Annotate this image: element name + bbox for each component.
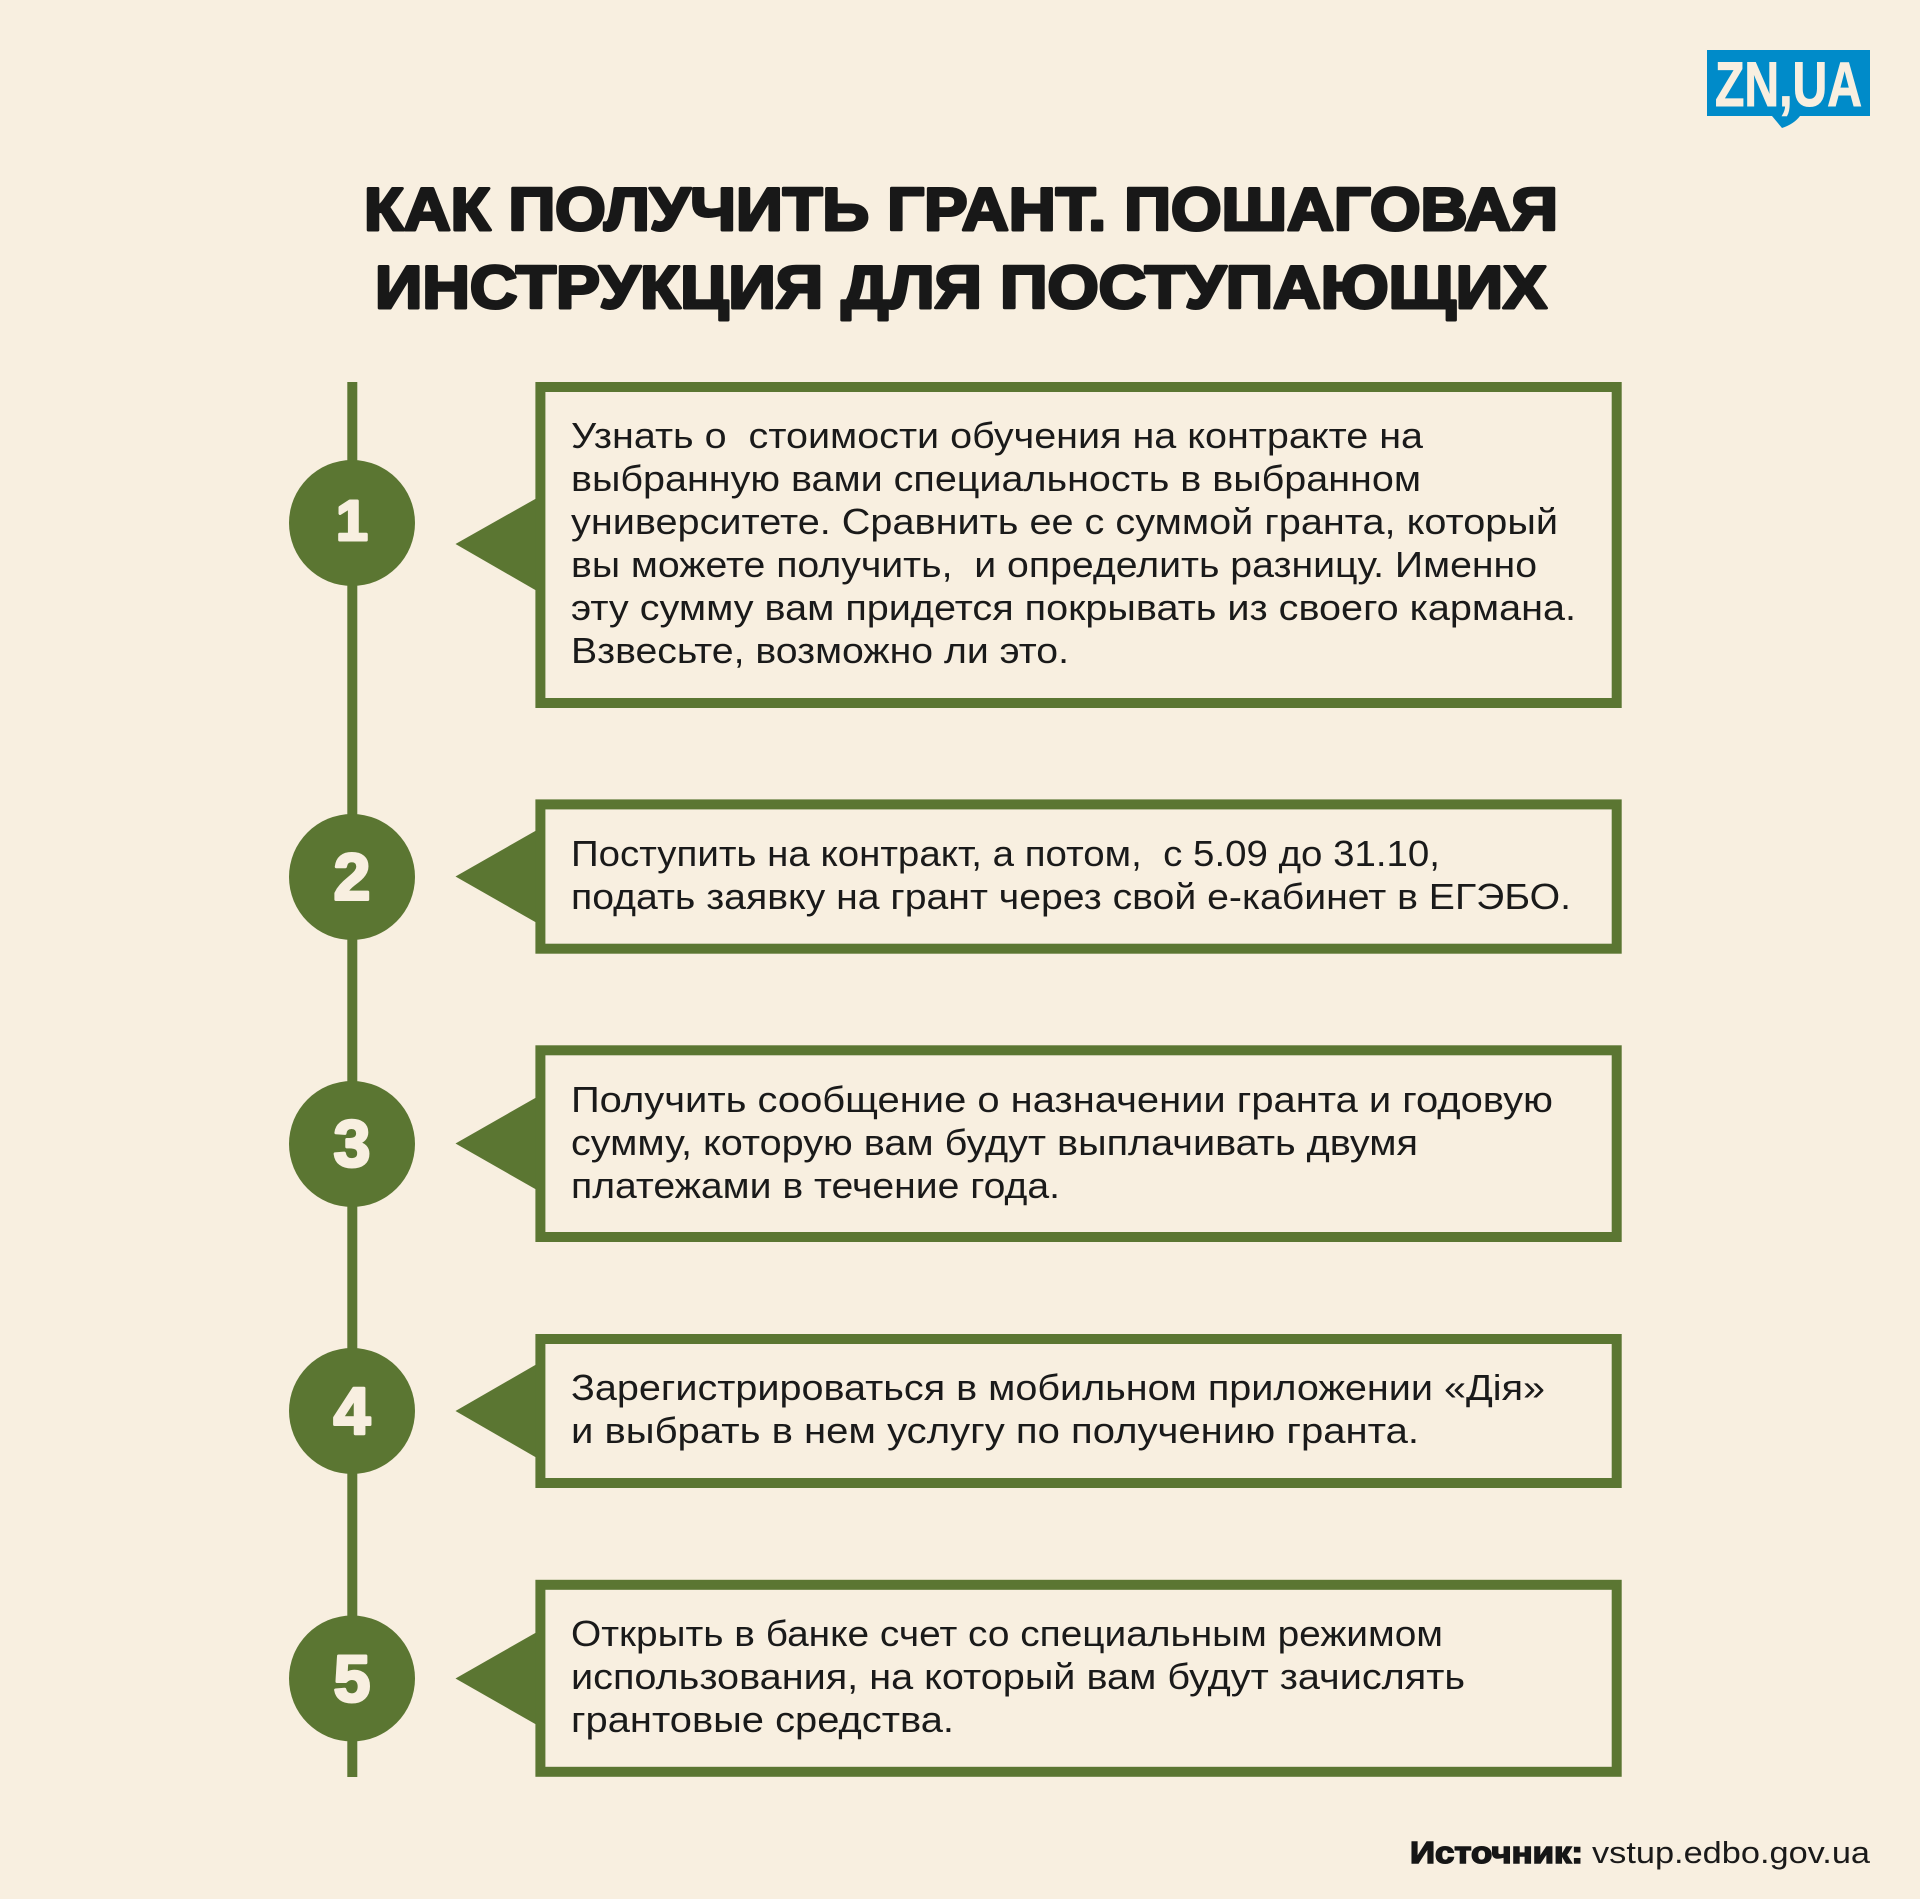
step 3 number badge bbox=[289, 1081, 415, 1207]
step 2 number badge: 2 bbox=[334, 840, 370, 914]
step 1 text: Узнать о стоимости обучения на контракте на bbox=[571, 415, 1424, 456]
step 1 text bbox=[571, 415, 1576, 671]
step 3 text: сумму, которую вам будут выплачивать двумя bbox=[571, 1122, 1418, 1163]
step 4 bbox=[289, 1339, 1617, 1483]
step 4 text bbox=[571, 1367, 1545, 1451]
step 1 pointer arrow bbox=[456, 498, 537, 591]
step 3 text box bbox=[540, 1050, 1617, 1237]
step 1 text: университете. Сравнить ее с суммой гранта, который bbox=[571, 501, 1558, 542]
step 4 text box bbox=[540, 1339, 1617, 1483]
step 1 text: эту сумму вам придется покрывать из своего кармана. bbox=[571, 587, 1576, 628]
step 4 text: и выбрать в нем услугу по получению гранта. bbox=[571, 1410, 1419, 1451]
step 3 text: Получить сообщение о назначении гранта и годовую bbox=[571, 1079, 1553, 1120]
step 4 number badge bbox=[289, 1348, 415, 1474]
step 1 text: Взвесьте, возможно ли это. bbox=[571, 630, 1069, 671]
step 5 pointer arrow bbox=[456, 1632, 537, 1725]
source line: vstup.edbo.gov.ua bbox=[1592, 1835, 1871, 1870]
source line: Источник: bbox=[1410, 1835, 1583, 1870]
step 3 pointer arrow bbox=[456, 1097, 537, 1190]
step 3 number badge: 3 bbox=[334, 1106, 370, 1180]
step 2 text bbox=[571, 833, 1571, 917]
step 2 bbox=[289, 804, 1617, 949]
step 5 text: грантовые средства. bbox=[571, 1699, 954, 1740]
step 4 number badge: 4 bbox=[334, 1374, 371, 1448]
step 5 number badge bbox=[289, 1616, 415, 1742]
title: ИНСТРУКЦИЯ ДЛЯ ПОСТУПАЮЩИХ bbox=[375, 254, 1547, 321]
step 5 text: Открыть в банке счет со специальным режимом bbox=[571, 1613, 1443, 1654]
step 5 text box bbox=[540, 1585, 1617, 1772]
step 3 text bbox=[571, 1079, 1553, 1206]
step 5 text bbox=[571, 1613, 1465, 1740]
step 1 bbox=[289, 387, 1617, 703]
step 2 text: Поступить на контракт, а потом, с 5.09 до 31.10, bbox=[571, 833, 1440, 874]
step 2 text box bbox=[540, 804, 1617, 949]
step 1 text: выбранную вами специальность в выбранном bbox=[571, 458, 1421, 499]
step 1 text: вы можете получить, и определить разницу. Именно bbox=[571, 544, 1537, 585]
timeline vertical line bbox=[347, 382, 357, 1777]
logo: ZN,UA: ZN,UA bbox=[1715, 50, 1862, 120]
step 2 number badge bbox=[289, 814, 415, 940]
step 3 text: платежами в течение года. bbox=[571, 1165, 1060, 1206]
step 3 bbox=[289, 1050, 1617, 1237]
source line bbox=[1410, 1835, 1871, 1870]
step 1 number badge bbox=[289, 460, 415, 586]
step 1 text box bbox=[540, 387, 1617, 703]
step 4 pointer arrow bbox=[456, 1364, 537, 1458]
step 1 number badge: 1 bbox=[336, 489, 368, 553]
step 4 text: Зарегистрироваться в мобильном приложении «Дія» bbox=[571, 1367, 1545, 1408]
step 2 pointer arrow bbox=[456, 830, 537, 923]
title bbox=[364, 176, 1558, 321]
step 5 text: использования, на который вам будут зачислять bbox=[571, 1656, 1465, 1697]
step 5 bbox=[289, 1585, 1617, 1772]
step 2 text: подать заявку на грант через свой е-кабинет в ЕГЭБО. bbox=[571, 876, 1571, 917]
step 5 number badge: 5 bbox=[334, 1642, 370, 1716]
title: КАК ПОЛУЧИТЬ ГРАНТ. ПОШАГОВАЯ bbox=[364, 176, 1558, 243]
